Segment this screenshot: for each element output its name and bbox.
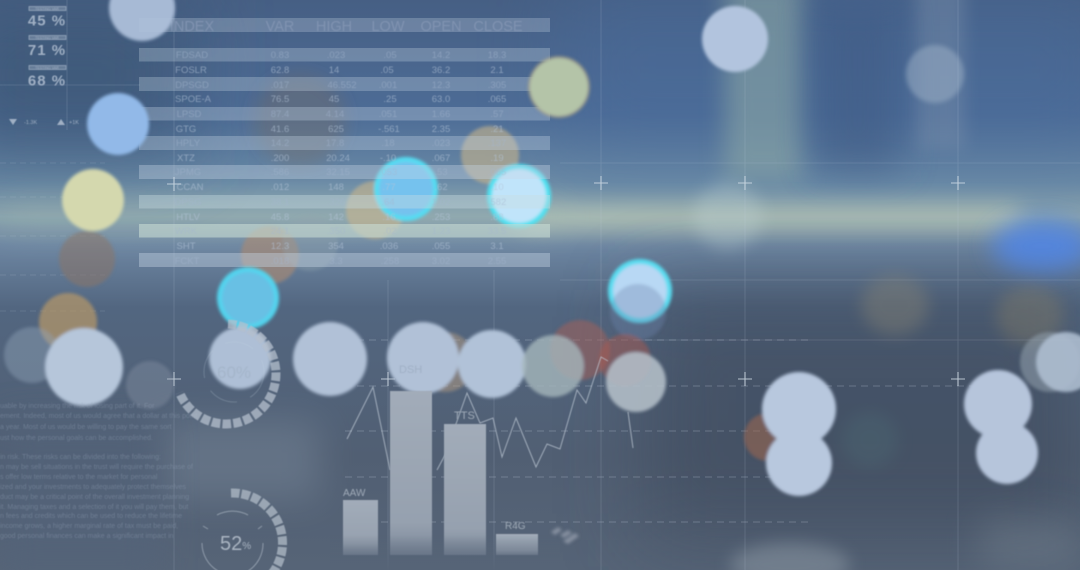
bottom fade over bars [330, 535, 560, 570]
table header [170, 19, 523, 35]
crosshair markers [167, 176, 965, 386]
table rows on stripes: 87.4 [271, 109, 289, 120]
table rows on stripes: .051 [379, 109, 397, 120]
bar AAW [343, 488, 378, 555]
table rows between stripes: -.10 [380, 153, 396, 164]
left paragraph text: ust how the personal goals can be accomplished. [0, 435, 153, 442]
table rows between stripes [175, 65, 506, 252]
table rows on stripes: JPMG [175, 167, 201, 178]
line chart [347, 357, 633, 470]
table rows between stripes: 625 [328, 124, 344, 135]
table rows on stripes: 3.02 [432, 256, 450, 267]
table rows between stripes: 36.2 [432, 65, 450, 76]
left paragraph text: income grows, a higher marginal rate of tax must be paid, [0, 523, 178, 530]
table rows on stripes: .02 [383, 226, 397, 237]
readout 45 percent: 45 % [28, 12, 66, 30]
table rows between stripes: 142 [328, 212, 344, 223]
table rows between stripes: .253 [432, 212, 450, 223]
table row stripes [139, 18, 550, 267]
table rows on stripes: .18 [381, 138, 395, 149]
table rows on stripes: .586 [271, 167, 289, 178]
left paragraph text: a year. Most of us would be willing to pay the same sort [0, 424, 172, 431]
small up and down ticker: +1K [69, 120, 79, 126]
readout 71 percent: TESTING VAR [35, 36, 59, 40]
gauge: top segmented ring [180, 324, 276, 424]
bar TTS [444, 410, 486, 555]
table rows on stripes: .023 [327, 50, 345, 61]
table rows between stripes: .05 [380, 65, 394, 76]
table rows on stripes: 17.8 [326, 138, 344, 149]
left paragraph text: n fees and credits which can be used to reduce the lifetime [0, 513, 182, 520]
table rows between stripes: .77 [382, 182, 396, 193]
bar DSH [390, 364, 432, 555]
table rows between stripes: 41.6 [271, 124, 289, 135]
left paragraph text: good personal finances can make a significant impact in [0, 533, 174, 540]
table rows between stripes: CCAN [177, 182, 204, 193]
table rows between stripes: .200 [271, 153, 289, 164]
gauge: bottom segmented ring 52 percent: % [242, 541, 251, 552]
table rows between stripes: 2.35 [432, 124, 450, 135]
readout 71 percent: 71 % [28, 42, 66, 59]
table rows on stripes: 14.2 [271, 138, 289, 149]
table rows on stripes: .64 [381, 197, 395, 208]
table rows on stripes: 3.3 [329, 256, 343, 267]
table rows on stripes: .326 [327, 197, 345, 208]
table header: OPEN [420, 19, 462, 35]
table rows between stripes: .62 [434, 182, 448, 193]
table rows on stripes: 14.2 [432, 50, 450, 61]
table rows on stripes: .57 [490, 109, 504, 120]
bar chart [343, 364, 538, 555]
gauge: bottom segmented ring 52 percent: 52 [220, 533, 242, 555]
bar R4G: R4G [505, 521, 526, 532]
table rows between stripes: 76.5 [271, 94, 289, 105]
table header: HIGH [316, 19, 352, 35]
table rows between stripes: .065 [488, 94, 506, 105]
small up and down ticker: -1.3K [24, 120, 37, 126]
table rows between stripes: HTLV [176, 212, 200, 223]
table rows between stripes: 12.3 [271, 241, 289, 252]
table rows on stripes: .137 [488, 138, 506, 149]
bar R4G [496, 521, 538, 555]
table rows on stripes: .053 [379, 167, 397, 178]
small stacked logo mark [551, 527, 579, 544]
table rows on stripes: 1.02 [432, 197, 450, 208]
table rows on stripes: .258 [381, 256, 399, 267]
readout 45 percent: TESTING VAR [35, 7, 59, 11]
top-left percentage readouts [28, 6, 66, 90]
bar AAW: AAW [343, 488, 366, 499]
table rows on stripes [175, 50, 506, 267]
table rows between stripes: 3.1 [490, 241, 504, 252]
left paragraph text: duct may be a critical point of the overall investment planning [0, 494, 189, 501]
table rows between stripes: .16 [382, 212, 396, 223]
readout 68 percent: 68 % [28, 72, 66, 90]
financial data table [139, 18, 550, 267]
table rows between stripes: 62.8 [271, 65, 289, 76]
table rows between stripes: 2.1 [490, 65, 504, 76]
table rows on stripes: .350 [327, 226, 345, 237]
table rows on stripes: 0.83 [271, 50, 289, 61]
table rows between stripes: .21 [490, 124, 504, 135]
table rows between stripes: 45.8 [271, 212, 289, 223]
bar TTS: TTS [454, 410, 475, 422]
table rows on stripes: .305 [488, 80, 506, 91]
table rows between stripes: 14 [329, 65, 339, 76]
left paragraph text: in risk. These risks can be divided into the following: [0, 454, 161, 461]
table rows on stripes: .017 [271, 80, 289, 91]
table rows on stripes: HPLY [176, 138, 201, 149]
table rows on stripes: 1.23 [432, 226, 450, 237]
table rows between stripes: .036 [380, 241, 398, 252]
small up and down ticker [9, 119, 79, 126]
table rows on stripes: .001 [379, 80, 397, 91]
table rows between stripes: SHT [176, 241, 196, 252]
table rows between stripes: 148 [328, 182, 344, 193]
table rows on stripes: 46.552 [327, 80, 357, 91]
table rows on stripes: 4.14 [326, 109, 344, 120]
table rows between stripes: .055 [432, 241, 450, 252]
table rows between stripes: FOSLR [175, 65, 207, 76]
table rows on stripes: WRK [175, 226, 198, 237]
table rows on stripes: .023 [432, 138, 450, 149]
left paragraph text [0, 403, 197, 540]
bokeh lights behind the table [241, 74, 551, 284]
table rows between stripes: .10 [490, 182, 504, 193]
table rows on stripes: FCKT [175, 256, 200, 267]
table rows between stripes: 63.0 [432, 94, 450, 105]
table rows between stripes: .19 [490, 153, 504, 164]
table rows on stripes: FDSAD [176, 50, 208, 61]
table rows on stripes: LPSD [177, 109, 202, 120]
left paragraph text: n may be sell situations in the trust will require the purchase of [0, 464, 193, 471]
table rows on stripes: DPSGD [175, 80, 209, 91]
table rows on stripes: .05 [383, 50, 397, 61]
table rows between stripes: XTZ [177, 153, 195, 164]
table rows on stripes: 24.1 [271, 226, 289, 237]
left paragraph text: it. Managing taxes and a selection of it you will pay them, but [0, 504, 188, 511]
table header: CLOSE [473, 19, 523, 35]
left paragraph text: ement. Indeed, most of us would agree that a dollar at this point [0, 413, 197, 420]
table rows between stripes: -.561 [378, 124, 400, 135]
table rows on stripes: 18.3 [488, 50, 506, 61]
table rows between stripes: .88 [490, 212, 504, 223]
table rows on stripes: 38.1 [271, 197, 289, 208]
table rows on stripes: 1.66 [432, 109, 450, 120]
table rows on stripes: 12.3 [432, 80, 450, 91]
readout 68 percent: TESTING VAR [35, 66, 59, 70]
table rows between stripes: .012 [271, 182, 289, 193]
table header: VAR [266, 19, 294, 35]
table rows between stripes: .25 [383, 94, 397, 105]
gauge: bottom segmented ring 52 percent [202, 493, 283, 570]
table rows on stripes: DPSG [175, 197, 201, 208]
table rows between stripes: GTG [176, 124, 196, 135]
table rows between stripes: SPOE-A [175, 94, 212, 105]
table rows on stripes: 32.15 [326, 167, 350, 178]
left paragraph text: s offer low terms relative to the market for personal [0, 474, 158, 481]
table rows on stripes: .065 [488, 167, 506, 178]
table header: LOW [371, 19, 405, 35]
gauge: top segmented ring: 60% [217, 363, 251, 382]
table rows on stripes: .018 [271, 256, 289, 267]
table rows between stripes: 20.24 [326, 153, 350, 164]
table rows on stripes: .582 [488, 197, 506, 208]
table rows between stripes: .067 [432, 153, 450, 164]
table header: INDEX [170, 19, 214, 35]
table rows between stripes: 354 [328, 241, 344, 252]
left paragraph text: ized and your investments to adequately protect themselves [0, 484, 186, 491]
left paragraph text: uable by increasing the risk of losing part of it. For [0, 403, 155, 410]
table rows on stripes: 2.55 [488, 256, 506, 267]
table rows on stripes: .53 [434, 167, 448, 178]
table rows between stripes: 45 [329, 94, 339, 105]
table rows on stripes: 33.5 [488, 226, 506, 237]
bar DSH: DSH [399, 364, 422, 376]
